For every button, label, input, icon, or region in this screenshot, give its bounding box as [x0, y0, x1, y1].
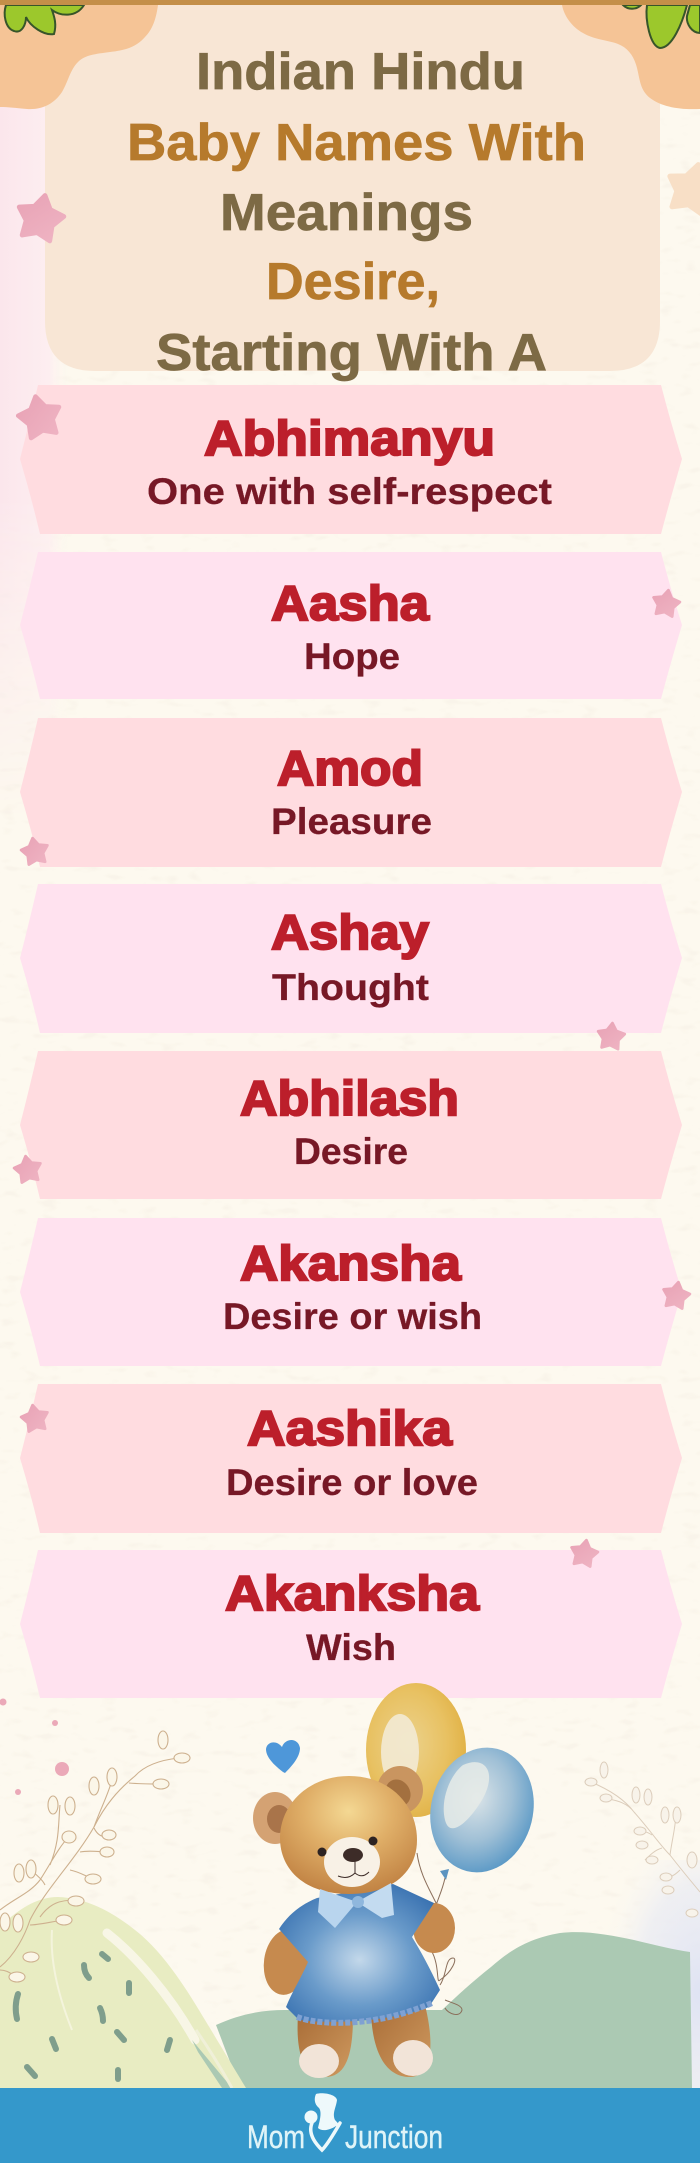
panel: Akanksha: Wish: [306, 1627, 396, 1668]
panel: Akansha: [20, 1218, 682, 1366]
balloon strings: [417, 1853, 462, 2014]
panel: Aasha: Aasha: [271, 577, 430, 631]
logo: MomJunction: Mom: [247, 2119, 305, 2155]
icon: green leaves right: [623, 5, 700, 48]
panel: Abhilash: Abhilash: [240, 1072, 459, 1126]
panel: Ashay: [20, 884, 682, 1033]
icon: teddy bear with balloons: [253, 1683, 547, 2078]
panel: Abhimanyu: Abhimanyu: [204, 412, 495, 466]
cream hill left: [0, 1897, 246, 2088]
icon: blue heart: [266, 1740, 300, 1773]
title: Starting With A: [156, 324, 547, 382]
branch left: [0, 1731, 190, 1982]
top-left corner blob: [0, 5, 158, 109]
pink dots: [0, 1698, 69, 1795]
panel: Ashay: Thought: [272, 967, 429, 1008]
top-right corner blob: [562, 5, 700, 109]
panel: Aasha: [20, 552, 682, 699]
decorative stars: [12, 159, 700, 1567]
panel: Aashika: [20, 1384, 682, 1533]
icon: green leaves left: [5, 5, 84, 34]
top bar: [0, 0, 700, 5]
bear right arm: [413, 1903, 455, 1953]
logo heart: [311, 2123, 340, 2150]
panel: Aashika: Aashika: [247, 1402, 453, 1456]
panel: Akanksha: [20, 1550, 682, 1698]
yellow balloon: [366, 1683, 466, 1817]
panel: Abhimanyu: [20, 385, 682, 534]
logo: MomJunction: [247, 2093, 443, 2155]
panel: Akanksha: Akanksha: [225, 1567, 480, 1621]
panel: Ashay: Ashay: [271, 906, 429, 960]
panel: Abhimanyu: One with self-respect: [147, 471, 552, 512]
bear ears: [253, 1766, 423, 1844]
title: Desire,: [266, 253, 440, 311]
bear face: [318, 1836, 380, 1887]
green hill right: [216, 1932, 692, 2088]
panel: Amod: [20, 718, 682, 867]
panel: Akansha: Desire or wish: [223, 1296, 482, 1337]
blue balloon: [417, 1737, 547, 1883]
panel: Abhilash: [20, 1051, 682, 1199]
blue bow tie: [318, 1883, 394, 1928]
branch right: [585, 1762, 700, 1917]
panel: Abhilash: Desire: [294, 1131, 408, 1172]
panel: Amod: Pleasure: [271, 801, 432, 842]
logo silhouette: [304, 2093, 339, 2130]
panel: Amod: Amod: [277, 742, 423, 796]
bear head: [280, 1776, 417, 1894]
bear legs: [298, 2005, 433, 2078]
bear left arm: [260, 1926, 312, 1998]
panel: Aasha: Hope: [304, 636, 400, 677]
title: Indian Hindu: [196, 43, 525, 101]
panel: Aashika: Desire or love: [226, 1462, 478, 1503]
logo: MomJunction: Junction: [345, 2119, 443, 2155]
footer bar: [0, 2088, 700, 2163]
title panel: [45, 5, 660, 371]
title: [127, 43, 586, 382]
panel: Akansha: Akansha: [240, 1237, 462, 1291]
title: Meanings: [220, 184, 473, 242]
blue dress: [279, 1884, 440, 2023]
title: Baby Names With: [127, 114, 586, 172]
